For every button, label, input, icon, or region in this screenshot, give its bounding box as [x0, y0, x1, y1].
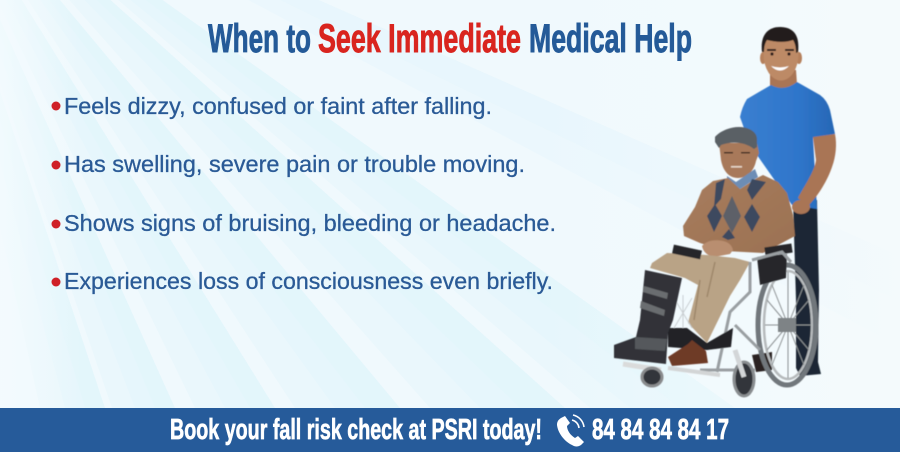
bullet 4: Experiences loss of consciousness even briefly. — [64, 268, 553, 294]
bullet 3: Shows signs of bruising, bleeding or headache. — [64, 210, 556, 236]
photo: caregiver pushing elderly man in wheelchair — [614, 27, 836, 396]
elderly man — [650, 127, 795, 343]
caregiver — [740, 27, 836, 376]
call to action text: Book your fall risk check at PSRI today! — [170, 414, 542, 446]
bullet 1: Feels dizzy, confused or faint after falling. — [64, 93, 492, 119]
title: When to — [208, 17, 311, 61]
title — [208, 17, 692, 61]
title: Medical Help — [529, 17, 692, 61]
icon: phone — [557, 415, 584, 446]
phone number: 84 84 84 84 17 — [592, 414, 729, 446]
footer banner — [0, 408, 900, 452]
title: Seek Immediate — [318, 17, 521, 61]
wheelchair — [623, 248, 816, 396]
bullet 2: Has swelling, severe pain or trouble moving. — [64, 151, 525, 177]
warning signs list — [52, 93, 556, 294]
leg brace and shoe — [614, 270, 708, 366]
